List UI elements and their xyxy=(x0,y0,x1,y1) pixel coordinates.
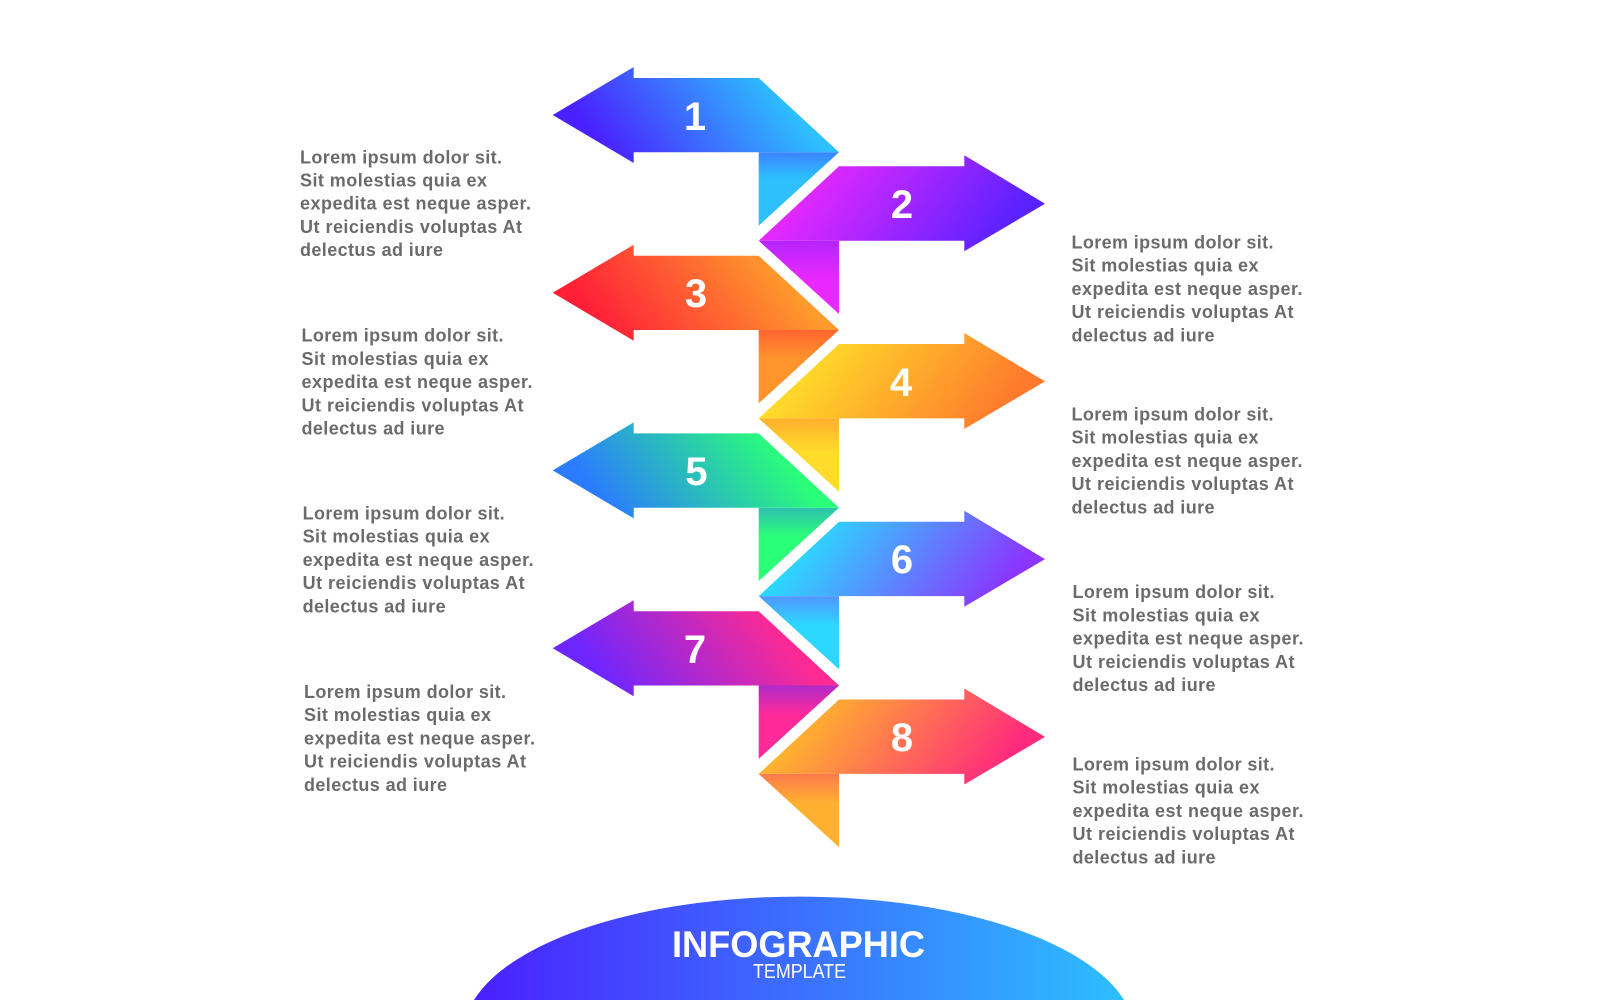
text block 3 xyxy=(302,326,532,438)
arrow 5: 5 xyxy=(685,450,708,494)
text block 2: delectus ad iure xyxy=(1072,325,1214,345)
text block 5: Lorem ipsum dolor sit. xyxy=(303,504,505,524)
text block 7: expedita est neque asper. xyxy=(304,728,535,748)
text block 3: Lorem ipsum dolor sit. xyxy=(302,326,504,346)
text block 8: Ut reiciendis voluptas At xyxy=(1072,824,1294,844)
text block 1 xyxy=(300,148,531,260)
text block 4: Lorem ipsum dolor sit. xyxy=(1072,404,1274,424)
text block 2: Lorem ipsum dolor sit. xyxy=(1072,232,1274,252)
text block 2: Ut reiciendis voluptas At xyxy=(1072,302,1294,322)
text block 6: delectus ad iure xyxy=(1072,675,1216,695)
text block 1: Lorem ipsum dolor sit. xyxy=(300,148,502,168)
text block 3: Sit molestias quia ex xyxy=(302,349,488,369)
text block 7: Lorem ipsum dolor sit. xyxy=(304,682,506,702)
arrow 6: 6 xyxy=(891,538,913,582)
text block 5: Ut reiciendis voluptas At xyxy=(303,573,525,593)
text block 1: delectus ad iure xyxy=(300,240,443,260)
text block 3: delectus ad iure xyxy=(302,418,444,438)
text block 5 xyxy=(303,504,534,616)
text block 4 xyxy=(1072,404,1302,517)
text block 6: Sit molestias quia ex xyxy=(1072,605,1260,625)
arrow 4 xyxy=(759,333,1045,492)
text block 3: expedita est neque asper. xyxy=(302,372,532,392)
arrow 3: 3 xyxy=(685,272,707,316)
title banner xyxy=(474,897,1124,1000)
text block 1: Sit molestias quia ex xyxy=(300,171,487,191)
arrow 2 xyxy=(759,155,1045,314)
text block 8: expedita est neque asper. xyxy=(1072,801,1304,821)
text block 4: Ut reiciendis voluptas At xyxy=(1072,474,1294,494)
arrow 7: 7 xyxy=(684,628,706,672)
text block 8: Lorem ipsum dolor sit. xyxy=(1072,754,1274,774)
arrow 8 xyxy=(759,688,1045,847)
arrow 3 xyxy=(553,245,839,403)
text block 4: Sit molestias quia ex xyxy=(1072,428,1258,448)
text block 4: expedita est neque asper. xyxy=(1072,451,1302,471)
text block 2: expedita est neque asper. xyxy=(1072,279,1302,299)
text block 6: Ut reiciendis voluptas At xyxy=(1072,652,1294,672)
text block 2 xyxy=(1072,232,1302,345)
text block 7: delectus ad iure xyxy=(304,775,447,795)
arrow 6 xyxy=(759,511,1045,669)
arrow 8: 8 xyxy=(891,716,913,760)
text block 5: Sit molestias quia ex xyxy=(303,527,490,547)
arrow 1 xyxy=(553,67,839,226)
arrow 4: 4 xyxy=(890,361,913,405)
text block 6: expedita est neque asper. xyxy=(1072,629,1304,649)
text block 1: Ut reiciendis voluptas At xyxy=(300,217,522,237)
text block 5: expedita est neque asper. xyxy=(303,550,534,570)
text block 7: Ut reiciendis voluptas At xyxy=(304,752,526,772)
arrow 5 xyxy=(553,422,839,581)
text block 5: delectus ad iure xyxy=(303,596,446,616)
text block 7: Sit molestias quia ex xyxy=(304,705,491,725)
text block 3: Ut reiciendis voluptas At xyxy=(302,395,524,415)
text block 6: Lorem ipsum dolor sit. xyxy=(1072,582,1274,602)
arrow 2: 2 xyxy=(891,183,913,227)
arrow 1: 1 xyxy=(684,95,706,139)
text block 8: delectus ad iure xyxy=(1072,847,1216,867)
title: INFOGRAPHIC xyxy=(672,924,925,965)
text block 8: Sit molestias quia ex xyxy=(1072,778,1260,798)
arrow 7 xyxy=(553,600,839,759)
text block 4: delectus ad iure xyxy=(1072,497,1214,517)
text block 7 xyxy=(304,682,535,795)
text block 6 xyxy=(1072,582,1304,695)
subtitle: TEMPLATE xyxy=(753,961,846,983)
text block 2: Sit molestias quia ex xyxy=(1072,256,1258,276)
text block 8 xyxy=(1072,754,1304,867)
text block 1: expedita est neque asper. xyxy=(300,194,531,214)
